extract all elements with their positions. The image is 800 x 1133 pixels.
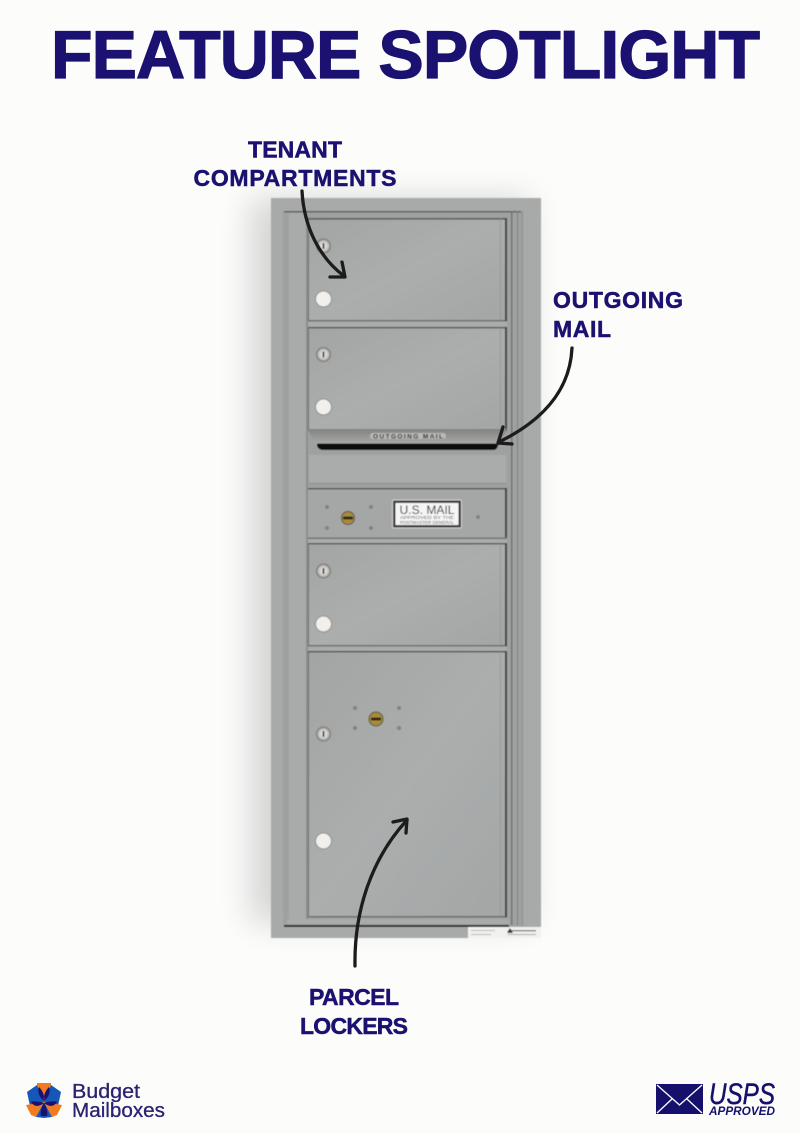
mailbox unit (250, 198, 541, 938)
label: outgoing mail (553, 287, 683, 342)
logo: Budget Mailboxes: Budget (72, 1081, 140, 1103)
label: parcel lockers: LOCKERS (300, 1013, 408, 1039)
label: tenant compartments: TENANT (248, 136, 342, 162)
label: outgoing mail: MAIL (553, 316, 611, 342)
U.S. Mail panel (308, 488, 507, 539)
title: FEATURE SPOTLIGHT (51, 17, 760, 93)
arrow: tenant compartments (302, 191, 345, 277)
door: tenant compartment 1 (308, 218, 507, 322)
door: tenant compartment 3 (308, 543, 507, 646)
logo: USPS approved (656, 1078, 775, 1118)
label: parcel lockers: PARCEL (309, 984, 399, 1010)
label: tenant compartments (194, 136, 396, 191)
U.S. Mail panel: POSTMASTER GENERAL (400, 520, 454, 525)
logo: USPS approved: USPS (709, 1078, 775, 1111)
logo mark (26, 1083, 62, 1118)
outer frame (271, 198, 541, 938)
icon: envelope (656, 1084, 703, 1114)
U.S. Mail panel: APPROVED BY THE (400, 515, 454, 520)
logo: Budget Mailboxes: Mailboxes (72, 1100, 165, 1122)
U.S. Mail panel: U.S. MAIL (400, 503, 455, 517)
outgoing mail slot (308, 429, 507, 450)
logo: Budget Mailboxes (26, 1081, 165, 1122)
label: tenant compartments: COMPARTMENTS (194, 165, 396, 191)
label: parcel lockers (300, 984, 408, 1039)
logo: USPS approved: APPROVED (708, 1104, 775, 1118)
arrow: parcel lockers (355, 819, 407, 966)
door: parcel locker (308, 651, 507, 918)
blank panel (309, 455, 506, 484)
manufacturer label (468, 927, 541, 938)
arrow: outgoing mail (498, 348, 572, 444)
label: outgoing mail: OUTGOING (553, 287, 683, 313)
outgoing mail slot: OUTGOING MAIL (373, 434, 443, 440)
door: tenant compartment 2 (308, 327, 507, 431)
